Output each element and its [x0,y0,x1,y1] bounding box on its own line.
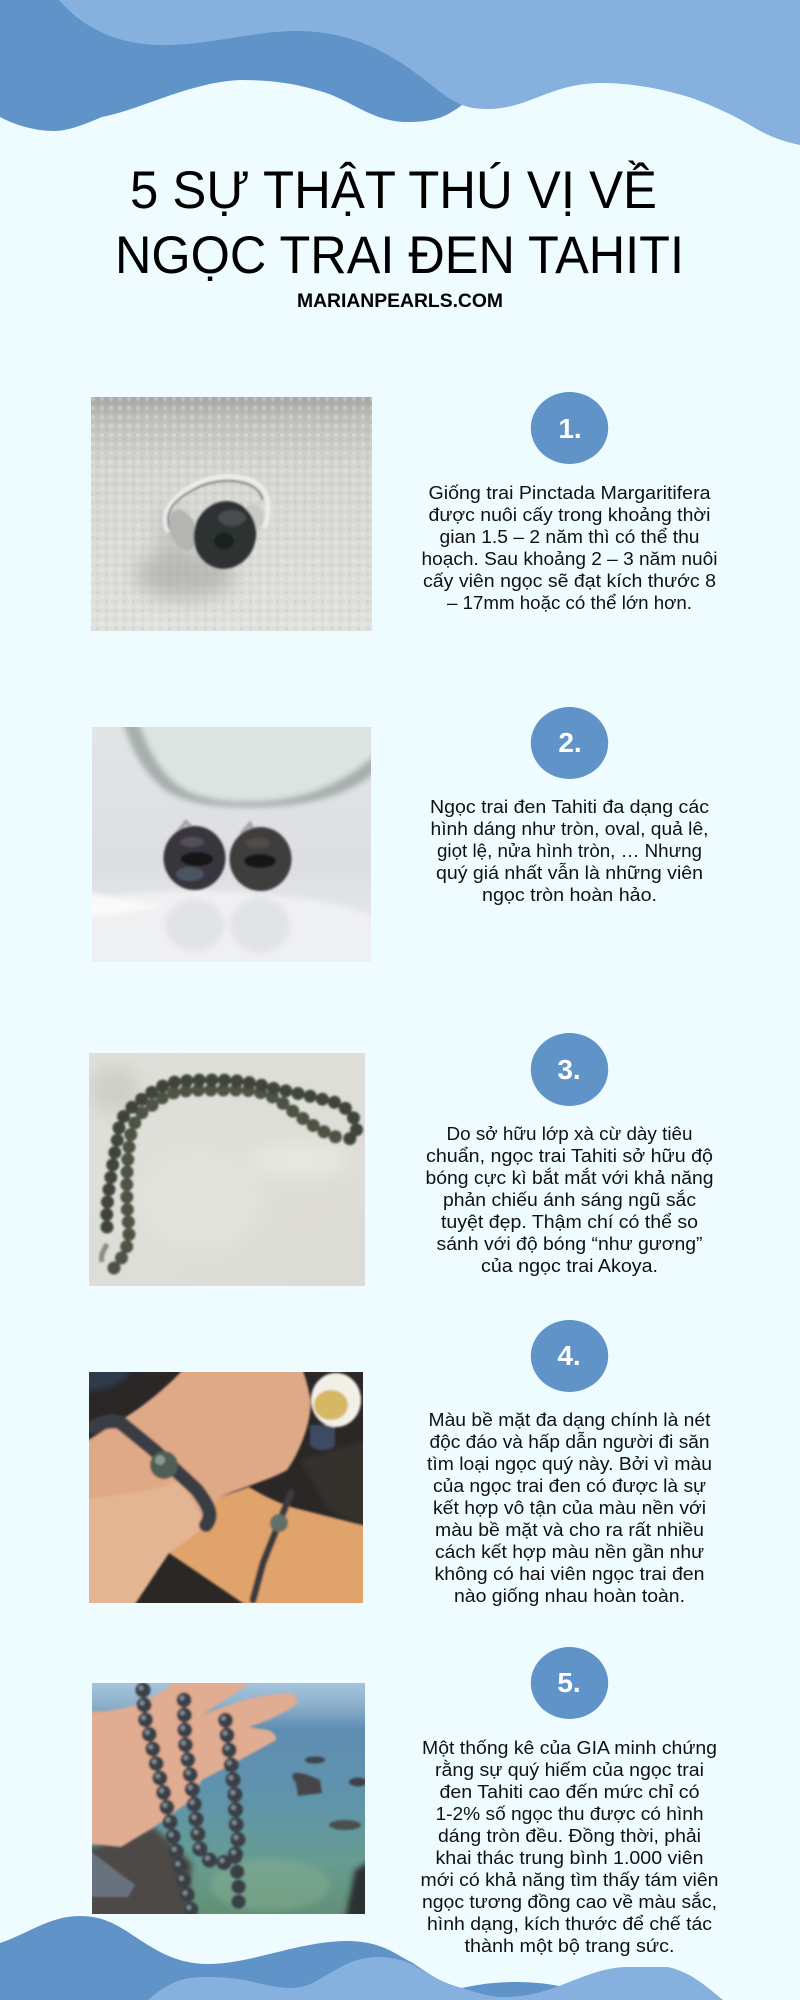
top wave: dark blue [0,0,500,131]
number badge 2 [531,707,608,779]
text block 3: chuẩn, ngọc trai Tahiti sở hữu độ [426,1146,713,1166]
text block 4: Màu bề mặt đa dạng chính là nét [428,1410,710,1430]
number badge 3 [531,1033,608,1106]
panel: fact 2 [85,707,709,970]
photo: pearl necklace on white cloth [89,1053,365,1286]
number badge 5 [531,1647,608,1719]
text block 4: màu bề mặt và cho ra rất nhiều [435,1520,704,1540]
text block 4: của ngọc trai đen có được là sự [433,1476,706,1496]
text block 3 [426,1124,714,1276]
text block 1: hoạch. Sau khoảng 2 – 3 năm nuôi [422,549,718,569]
text block 3: của ngọc trai Akoya. [481,1256,658,1276]
number badge 4 [531,1320,608,1392]
photo: pearl necklace held over the sea [92,1683,365,1914]
text block 5: hình dạng, kích thước để chế tác [427,1914,712,1934]
bottom wave: light blue [148,1957,723,2000]
number badge 3: 3. [557,1054,581,1085]
text block 5: đen Tahiti cao đến mức chỉ có [440,1782,700,1802]
text block 3: bóng cực kì bắt mắt với khả năng [426,1167,714,1188]
text block 2: Ngọc trai đen Tahiti đa dạng các [430,797,709,817]
text block 4: nào giống nhau hoàn toàn. [454,1586,685,1606]
title [115,160,684,285]
text block 2 [430,797,709,905]
text block 1: được nuôi cấy trong khoảng thời [428,505,710,525]
text block 1: Giống trai Pinctada Margaritifera [428,483,712,503]
text block 1 [422,483,718,613]
text block 5: Một thống kê của GIA minh chứng [422,1738,717,1758]
panel: fact 3 [89,1033,714,1286]
text block 5 [420,1738,718,1956]
text block 4: cách kết hợp màu nền gần như [435,1542,704,1562]
panel: fact 4 [80,1320,712,1610]
text block 4: không có hai viên ngọc trai đen [434,1564,704,1584]
number badge 5: 5. [557,1667,581,1698]
text block 4: kết hợp vô tận của màu nền với [433,1498,706,1518]
text block 3: Do sở hữu lớp xà cừ dày tiêu [446,1124,692,1144]
panel: fact 1 [91,392,718,631]
text block 4: độc đáo và hấp dẫn người đi săn [430,1431,710,1452]
text block 4: tìm loại ngọc quý này. Bởi vì màu [427,1454,712,1474]
text block 5: mới có khả năng tìm thấy tám viên [420,1870,718,1890]
text block 1: – 17mm hoặc có thể lớn hơn. [447,593,692,613]
text block 3: phản chiếu ánh sáng ngũ sắc [443,1189,696,1210]
text block 2: quý giá nhất vẫn là những viên [436,862,703,883]
number badge 1 [531,392,608,464]
subtitle: website: MARIANPEARLS.COM [297,291,503,312]
text block 4 [427,1410,712,1606]
photo: pearl earrings on white dish [92,727,371,962]
title: 5 SỰ THẬT THÚ VỊ VỀ [130,160,657,220]
photo: black pearl ring [91,397,372,631]
text block 5: ngọc tương đồng cao về màu sắc, [422,1891,717,1912]
text block 3: sánh với độ bóng “như gương” [436,1234,702,1254]
text block 2: giọt lệ, nửa hình tròn, … Nhưng [437,841,702,861]
text block 2: ngọc tròn hoàn hảo. [482,885,657,905]
text block 1: gian 1.5 – 2 năm thì có thể thu [440,527,700,547]
photo: wrists with pearl bracelets [89,1372,363,1603]
text block 3: tuyệt đẹp. Thậm chí có thể so [441,1212,698,1232]
text block 5: 1-2% số ngọc thu được có hình [436,1804,704,1824]
number badge 1: 1. [558,413,582,444]
title: NGỌC TRAI ĐEN TAHITI [115,226,684,285]
number badge 4: 4. [557,1340,581,1371]
panel: fact 5 [85,1647,718,1956]
text block 5: dáng tròn đều. Đồng thời, phải [438,1826,701,1846]
text block 5: khai thác trung bình 1.000 viên [436,1848,704,1868]
text block 5: thành một bộ trang sức. [464,1936,674,1956]
text block 1: cấy viên ngọc sẽ đạt kích thước 8 [423,571,716,591]
text block 2: hình dáng như tròn, oval, quả lê, [430,819,708,839]
bottom wave: dark blue [0,1916,600,2000]
top wave: light blue [59,0,800,145]
text block 5: rằng sự quý hiếm của ngọc trai [435,1759,704,1780]
number badge 2: 2. [558,727,582,758]
